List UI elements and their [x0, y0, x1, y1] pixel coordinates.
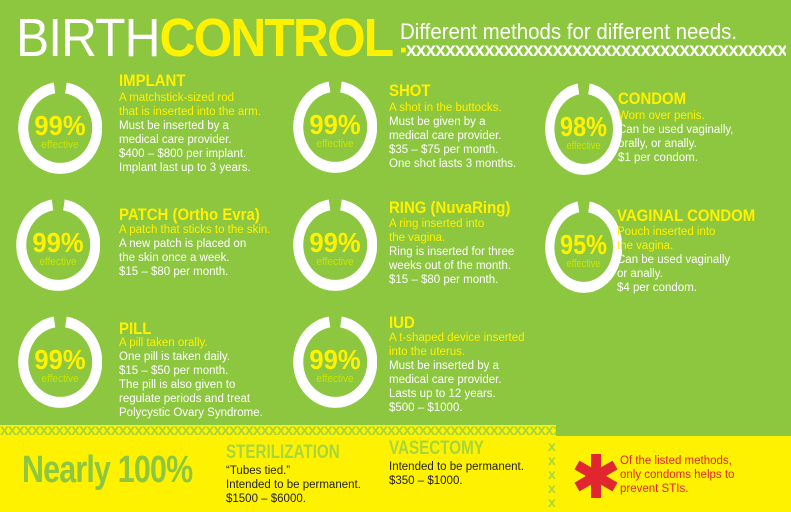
ring: shot 99%	[293, 82, 377, 173]
ring: pill 99%	[18, 316, 102, 408]
ring: nuvaring 99%: effective	[316, 256, 354, 268]
panel: pill: regulate periods and treat	[119, 393, 250, 405]
panel: iud: IUD	[389, 313, 415, 332]
panel: iud	[293, 313, 525, 414]
icon: red asterisk	[574, 454, 618, 498]
title: BIRTHCONTROL	[16, 8, 392, 68]
panel: implant: $400 – $800 per implant.	[119, 148, 246, 160]
STI note: prevent STIs.	[620, 483, 688, 495]
panel: shot: $35 – $75 per month.	[389, 144, 498, 156]
ring: shot 99%: effective	[316, 138, 354, 150]
vasectomy: $350 – $1000.	[389, 475, 463, 487]
ring: pill 99%: effective	[41, 373, 79, 385]
ring: nuvaring 99%	[293, 200, 377, 291]
panel: ring: $15 – $80 per month.	[389, 274, 498, 286]
panel: vaginal condom: Pouch inserted into	[617, 226, 715, 238]
subtitle: Different methods for different needs.	[400, 19, 737, 44]
panel: patch: A new patch is placed on	[119, 238, 246, 250]
panel: ring: Ring is inserted for three	[389, 246, 514, 258]
panel: shot	[293, 81, 516, 173]
panel: ring: weeks out of the month.	[389, 260, 511, 272]
STI note: Of the listed methods,	[620, 455, 732, 467]
panel: implant: medical care provider.	[119, 134, 232, 146]
panel: ring: the vagina.	[389, 232, 445, 244]
panel: pill: One pill is taken daily.	[119, 351, 230, 363]
bottom yellow band: x	[548, 452, 556, 468]
vasectomy: Intended to be permanent.	[389, 461, 524, 473]
panel: ring: A ring inserted into	[389, 218, 484, 230]
panel: iud: A t-shaped device inserted	[389, 332, 525, 344]
panel: condom	[545, 84, 734, 175]
panel: condom: orally, or anally.	[618, 138, 697, 150]
ring: vaginal condom 95%	[545, 202, 622, 293]
bottom yellow band: x	[548, 466, 556, 482]
ring: shot 99%: 99%	[309, 109, 361, 140]
panel: vaginal condom	[545, 202, 755, 294]
panel: vaginal condom: or anally.	[617, 268, 663, 280]
panel: iud: medical care provider.	[389, 374, 502, 386]
panel: implant: IMPLANT	[119, 71, 185, 90]
panel: iud: Lasts up to 12 years.	[389, 388, 496, 400]
ring: patch 99%: 99%	[32, 227, 84, 258]
panel: implant: Implant last up to 3 years.	[119, 162, 251, 174]
panel: pill: Polycystic Ovary Syndrome.	[119, 407, 263, 419]
sterilization: STERILIZATION	[226, 442, 340, 463]
panel: patch	[16, 200, 270, 291]
ring: condom 98%	[545, 84, 622, 175]
panel: pill	[18, 316, 263, 419]
panel: condom: $1 per condom.	[618, 152, 698, 164]
ring: vaginal condom 95%: effective	[566, 258, 601, 270]
nearly 100%: Nearly 100%	[22, 449, 192, 491]
panel: pill: A pill taken orally.	[119, 337, 208, 349]
vasectomy	[389, 438, 524, 487]
panel: shot: A shot in the buttocks.	[389, 102, 502, 114]
panel: implant: Must be inserted by a	[119, 120, 229, 132]
panel: vaginal condom: VAGINAL CONDOM	[617, 206, 755, 225]
panel: iud: into the uterus.	[389, 346, 465, 358]
panel: ring: RING (NuvaRing)	[389, 198, 510, 217]
ring: implant 99%	[18, 82, 102, 174]
panel: shot: SHOT	[389, 81, 431, 100]
panel: pill: PILL	[119, 319, 151, 338]
vasectomy: VASECTOMY	[389, 438, 484, 459]
bottom yellow band: x	[548, 438, 556, 454]
ring: implant 99%: 99%	[34, 110, 86, 141]
panel: pill: The pill is also given to	[119, 379, 235, 391]
ring: patch 99%	[16, 200, 100, 291]
STI note: only condoms helps to	[620, 469, 734, 481]
panel: pill: $15 – $50 per month.	[119, 365, 228, 377]
panel: condom: CONDOM	[618, 89, 686, 108]
panel: patch: A patch that sticks to the skin.	[119, 224, 270, 236]
ring: condom 98%: effective	[566, 140, 601, 152]
panel: implant: that is inserted into the arm.	[119, 106, 261, 118]
panel: vaginal condom: $4 per condom.	[617, 282, 697, 294]
panel: patch: $15 – $80 per month.	[119, 266, 228, 278]
panel: implant: A matchstick-sized rod	[119, 92, 234, 104]
panel: patch: the skin once a week.	[119, 252, 230, 264]
bottom yellow band: x	[548, 494, 556, 510]
panel: patch: PATCH (Ortho Evra)	[119, 205, 260, 224]
panel: ring	[293, 198, 514, 291]
bottom yellow band	[0, 422, 791, 512]
panel: shot: Must be given by a	[389, 116, 486, 128]
panel: iud: Must be inserted by a	[389, 360, 499, 372]
panel: condom: Can be used vaginally,	[618, 124, 734, 136]
panel: shot: One shot lasts 3 months.	[389, 158, 516, 170]
ring: pill 99%: 99%	[34, 344, 86, 375]
sterilization: $1500 – $6000.	[226, 493, 306, 505]
ring: condom 98%: 98%	[560, 112, 607, 143]
ring: implant 99%: effective	[41, 139, 79, 151]
panel: condom: Worn over penis.	[618, 110, 705, 122]
panel: implant	[18, 71, 261, 174]
panel: vaginal condom: the vagina.	[617, 240, 673, 252]
bottom yellow band: x	[548, 480, 556, 496]
sterilization: Intended to be permanent.	[226, 479, 361, 491]
ring: iud 99%: effective	[316, 373, 354, 385]
panel: shot: medical care provider.	[389, 130, 502, 142]
STI note	[620, 455, 734, 495]
ring: vaginal condom 95%: 95%	[560, 230, 607, 261]
ring: patch 99%: effective	[39, 256, 77, 268]
panel: iud: $500 – $1000.	[389, 402, 463, 414]
ring: iud 99%: 99%	[309, 344, 361, 375]
sterilization	[226, 442, 361, 505]
ring: iud 99%	[293, 316, 377, 408]
sterilization: “Tubes tied.”	[226, 465, 290, 477]
ring: nuvaring 99%: 99%	[309, 227, 361, 258]
panel: vaginal condom: Can be used vaginally	[617, 254, 730, 266]
